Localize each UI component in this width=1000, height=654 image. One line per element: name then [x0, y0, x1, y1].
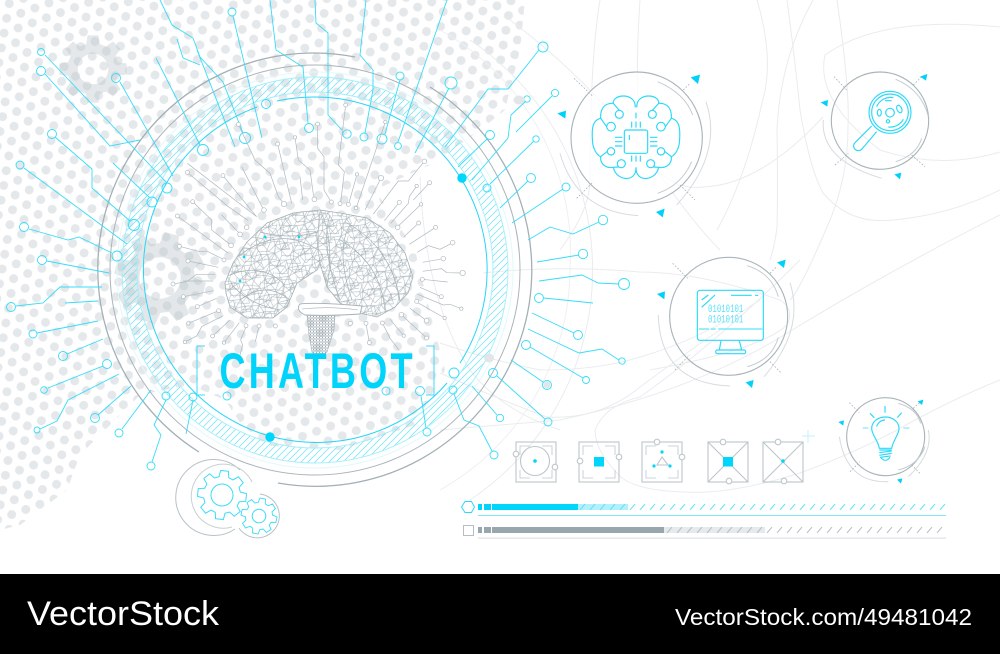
- faint grey gear top left: [59, 35, 127, 103]
- title: CHATBOT: CHATBOT: [220, 344, 413, 399]
- concentric rings: [98, 53, 532, 486]
- binary text: 01010101: [708, 304, 743, 316]
- node panel 5: [763, 439, 803, 484]
- binary text: 01010101: [708, 314, 743, 326]
- footer bar: [0, 574, 1000, 654]
- faint background curves: [420, 0, 1000, 500]
- hatched ring: [130, 85, 500, 455]
- progress bar grey: [464, 526, 946, 539]
- brain stem: [298, 303, 362, 355]
- faint grey blobs: [484, 96, 551, 389]
- footer url: VectorStock.com/49481042: [675, 604, 972, 630]
- icon: magnifier: [821, 72, 929, 179]
- node panels row: [513, 439, 803, 484]
- icon: light bulb: [838, 398, 929, 484]
- binary text: [708, 304, 743, 326]
- halftone dot field: [0, 0, 525, 530]
- node panel 3: [642, 439, 685, 482]
- faint grey gear left: [104, 222, 216, 334]
- footer brand: VectorStock: [27, 595, 220, 633]
- progress bar cyan: [462, 502, 946, 516]
- gears icon: [176, 459, 280, 538]
- ring marker dots: [265, 173, 467, 442]
- brain node dots: [239, 236, 300, 282]
- node panel 4: [708, 439, 748, 484]
- icon: monitor with binary: [657, 257, 794, 388]
- cyan circuit traces: [6, 0, 630, 470]
- low-poly brain: [220, 205, 420, 355]
- crosshair: [802, 430, 815, 443]
- grey neuron traces around the brain: [171, 103, 465, 361]
- icon: brain chip: [557, 72, 711, 217]
- node panel 1: [513, 442, 558, 482]
- node panel 2: [577, 442, 622, 482]
- title bracket: [197, 346, 434, 395]
